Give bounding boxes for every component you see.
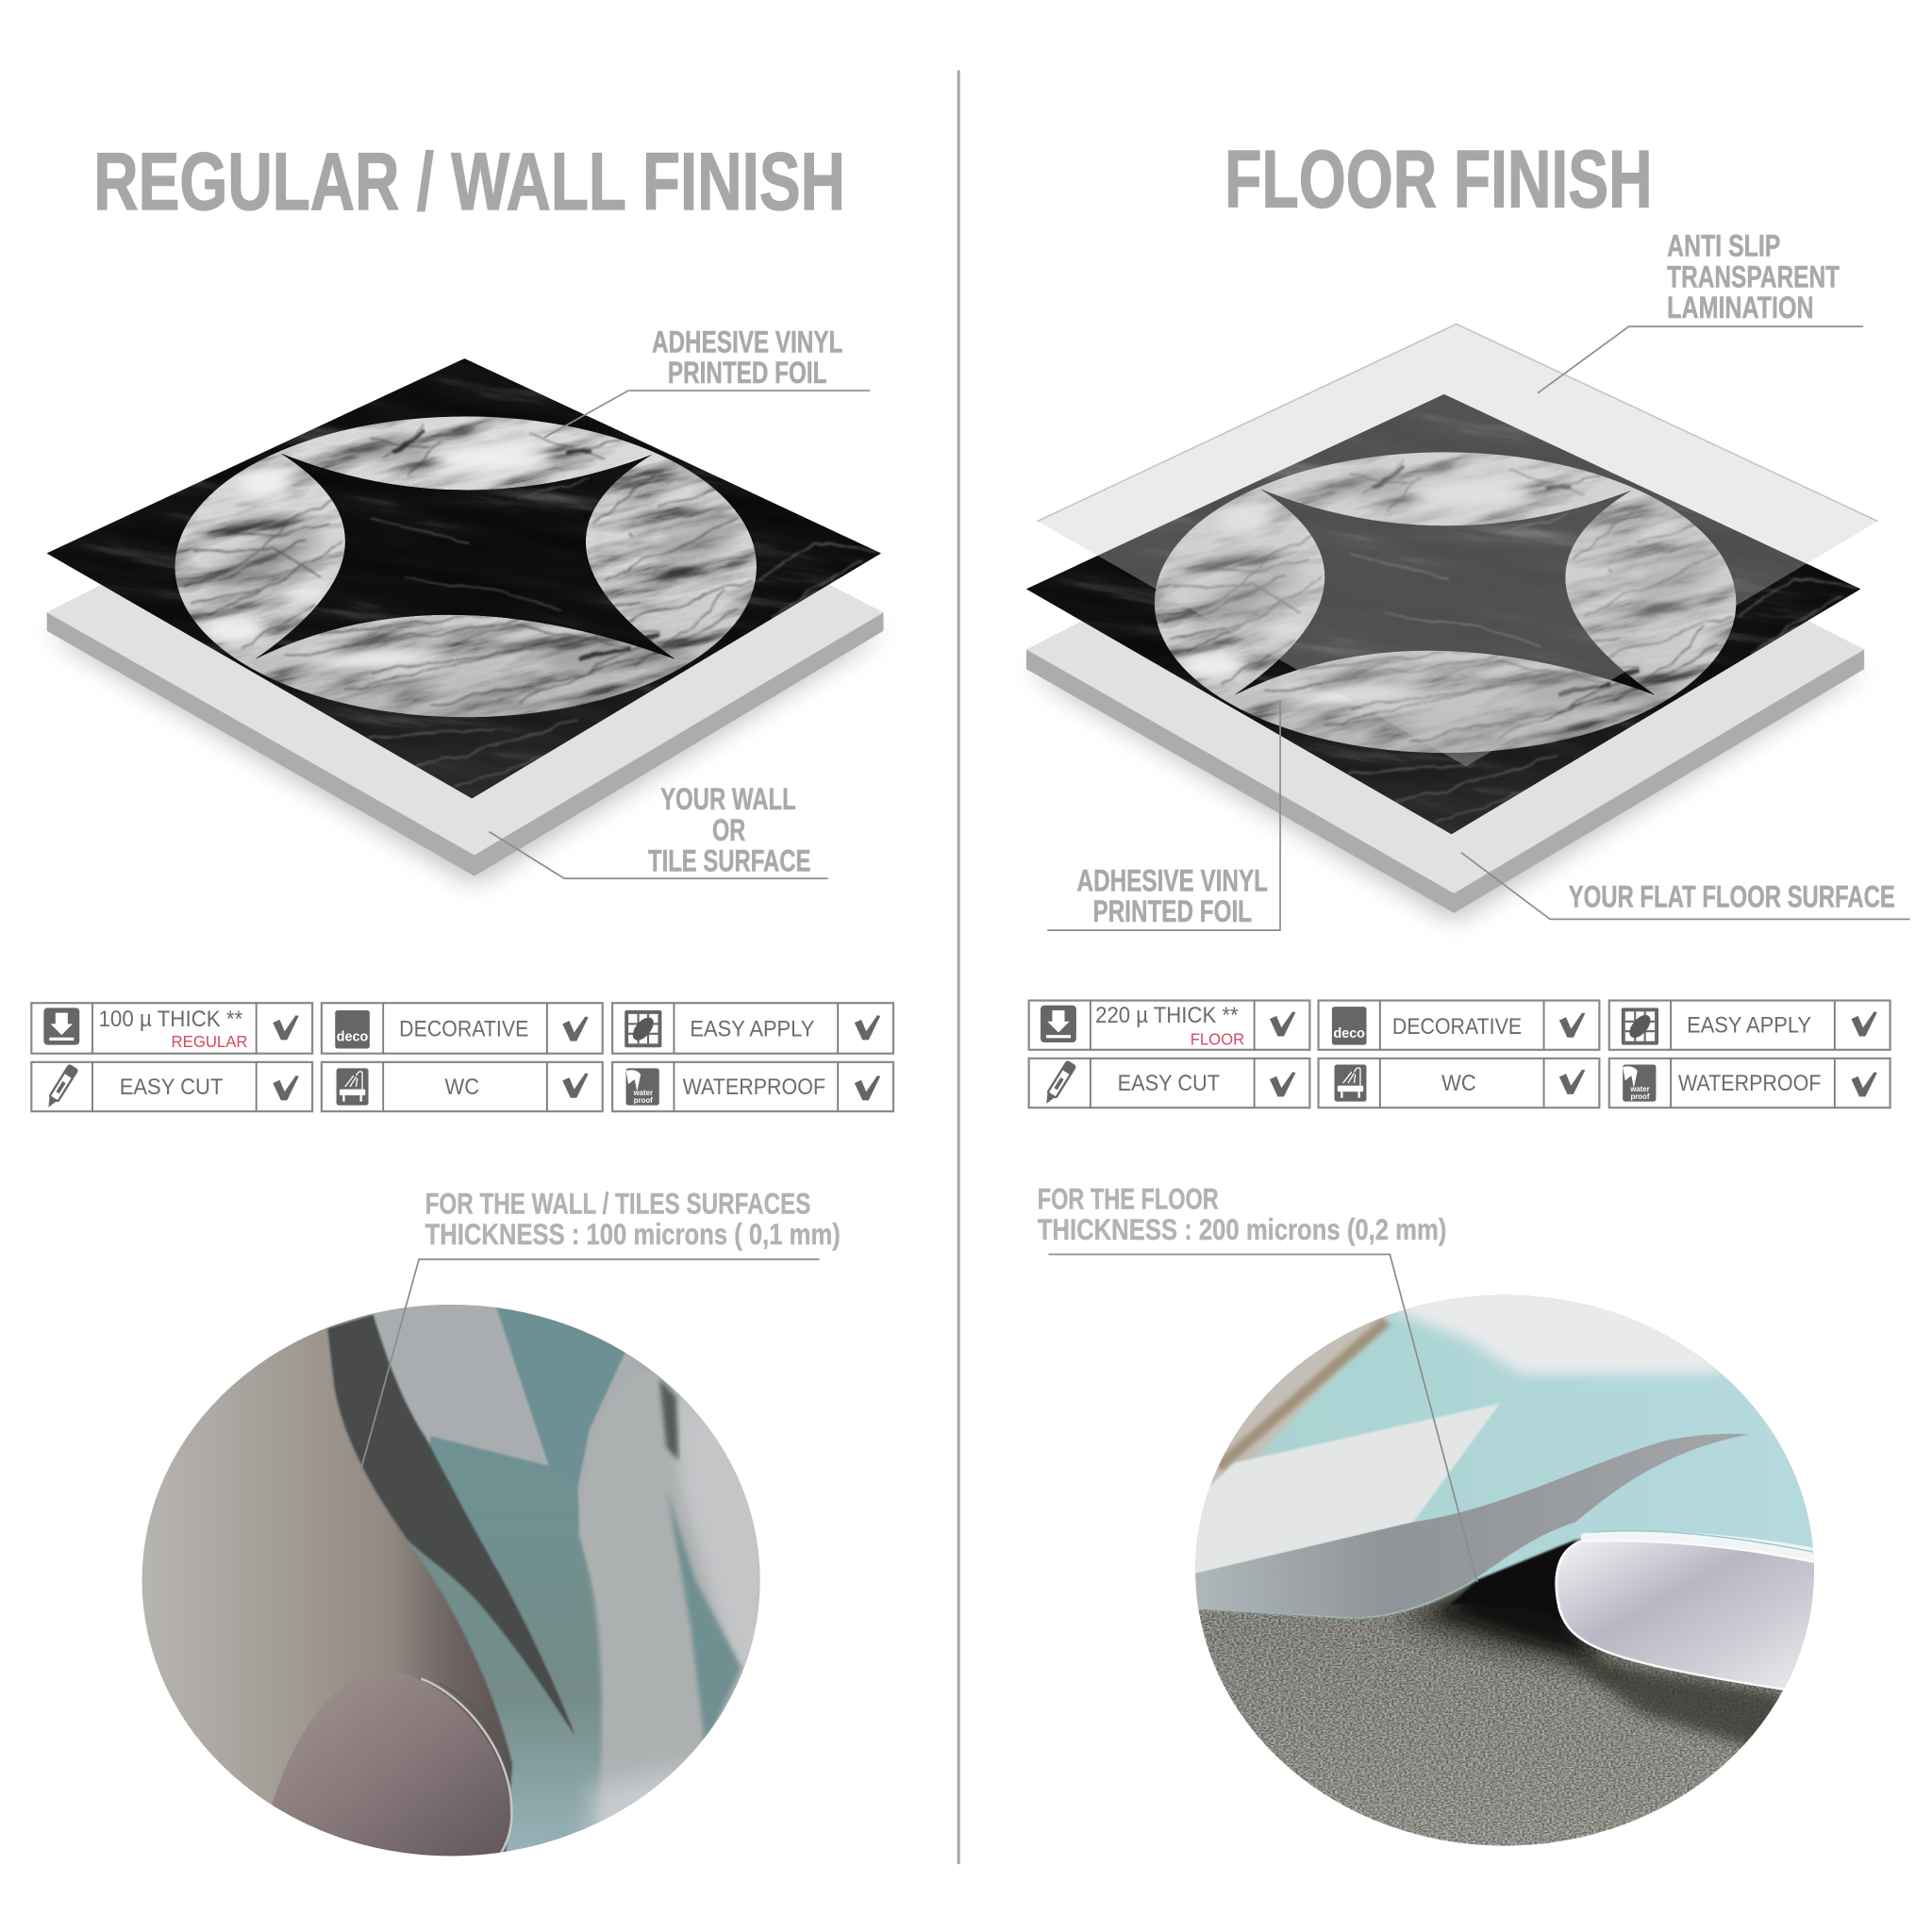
feature: easy cut [31,1062,312,1111]
feature: easy cut: EASY CUT [120,1074,224,1100]
transparent lamination layer [1038,325,1878,766]
leader line: wall sample [359,1259,820,1474]
wall slab layer [47,399,883,882]
feature: decorative [1319,1001,1599,1050]
feature: decorative: deco [1333,1026,1365,1041]
callout: your flat floor surface [1461,853,1909,919]
feature: 220 micron thick: 220 µ THICK ** [1095,1003,1239,1028]
feature: waterproof: water [1629,1085,1650,1093]
caption: floor thickness: FOR THE FLOOR [1038,1182,1219,1215]
feature: easy apply [612,1003,893,1054]
caption: wall thickness: THICKNESS : 100 microns ( 0,1 mm) [425,1218,841,1251]
feature: waterproof: proof [634,1096,653,1105]
callout: adhesive vinyl printed foil: PRINTED FOIL [1093,893,1252,928]
feature: decorative [322,1003,603,1054]
feature: wc: WC [445,1074,479,1100]
adhesive vinyl marble foil [0,150,1053,1008]
adhesive vinyl marble foil [859,186,1932,1044]
feature: decorative: DECORATIVE [399,1016,528,1041]
feature: decorative: DECORATIVE [1392,1014,1522,1040]
callout: anti slip transparent lamination: TRANSPARENT [1667,258,1840,293]
feature: wc [1319,1058,1599,1108]
feature: 220 micron thick: FLOOR [1191,1030,1244,1049]
callout: adhesive vinyl printed foil: PRINTED FOIL [668,355,826,390]
feature: decorative: deco [337,1030,369,1045]
callout: adhesive vinyl printed foil: ADHESIVE VINYL [1077,862,1268,897]
title: floor finish: FLOOR FINISH [1224,134,1653,225]
caption: wall thickness [425,1188,841,1251]
caption: wall thickness: FOR THE WALL / TILES SURFACES [425,1188,810,1221]
floor slab layer [1026,436,1864,919]
photo circle: wall vinyl sample [137,1296,768,1864]
feature: waterproof: proof [1630,1092,1650,1101]
feature: 220 micron thick [1029,1001,1309,1050]
caption: floor thickness [1038,1182,1446,1246]
photo circle: floor vinyl sample [1191,1280,1820,1850]
feature: waterproof: water [633,1089,653,1097]
feature: 100 micron thick [31,1003,312,1054]
callout: your wall or tile surface: YOUR WALL [660,781,796,816]
feature: waterproof [1609,1058,1890,1108]
leader line: floor sample [1049,1255,1477,1582]
panel: regular wall finish [0,137,1053,1864]
feature: easy cut [1029,1058,1309,1108]
callout: your wall or tile surface [490,781,828,878]
callout: anti slip transparent lamination [1538,228,1863,393]
callout: your wall or tile surface: OR [712,812,745,847]
feature: waterproof: WATERPROOF [1678,1071,1821,1096]
feature: easy apply: EASY APPLY [690,1016,814,1041]
feature: wc [322,1062,603,1111]
callout: anti slip transparent lamination: ANTI SLIP [1667,228,1780,263]
feature: 100 micron thick: REGULAR [172,1032,248,1051]
panel: floor finish [1026,149,1909,1846]
feature: easy apply [1609,1001,1890,1050]
callout: adhesive vinyl printed foil: ADHESIVE VINYL [652,325,842,359]
title: regular wall finish: REGULAR / WALL FINISH [93,137,845,227]
divider [958,70,959,1864]
feature: waterproof: WATERPROOF [683,1074,825,1100]
callout: adhesive vinyl printed foil [544,325,870,438]
callout: anti slip transparent lamination: LAMINATION [1667,290,1814,325]
feature table: floor finish [1029,1001,1890,1108]
caption: floor thickness: THICKNESS : 200 microns (0,2 mm) [1038,1213,1446,1246]
feature: easy apply: EASY APPLY [1687,1013,1811,1039]
callout: adhesive vinyl printed foil [1047,700,1280,930]
feature: 100 micron thick: 100 µ THICK ** [98,1007,243,1032]
feature: easy cut: EASY CUT [1118,1071,1220,1096]
feature: wc: WC [1441,1071,1476,1096]
feature: waterproof [612,1062,893,1111]
feature table: regular finish [31,1003,893,1111]
callout: your wall or tile surface: TILE SURFACE [648,842,810,877]
